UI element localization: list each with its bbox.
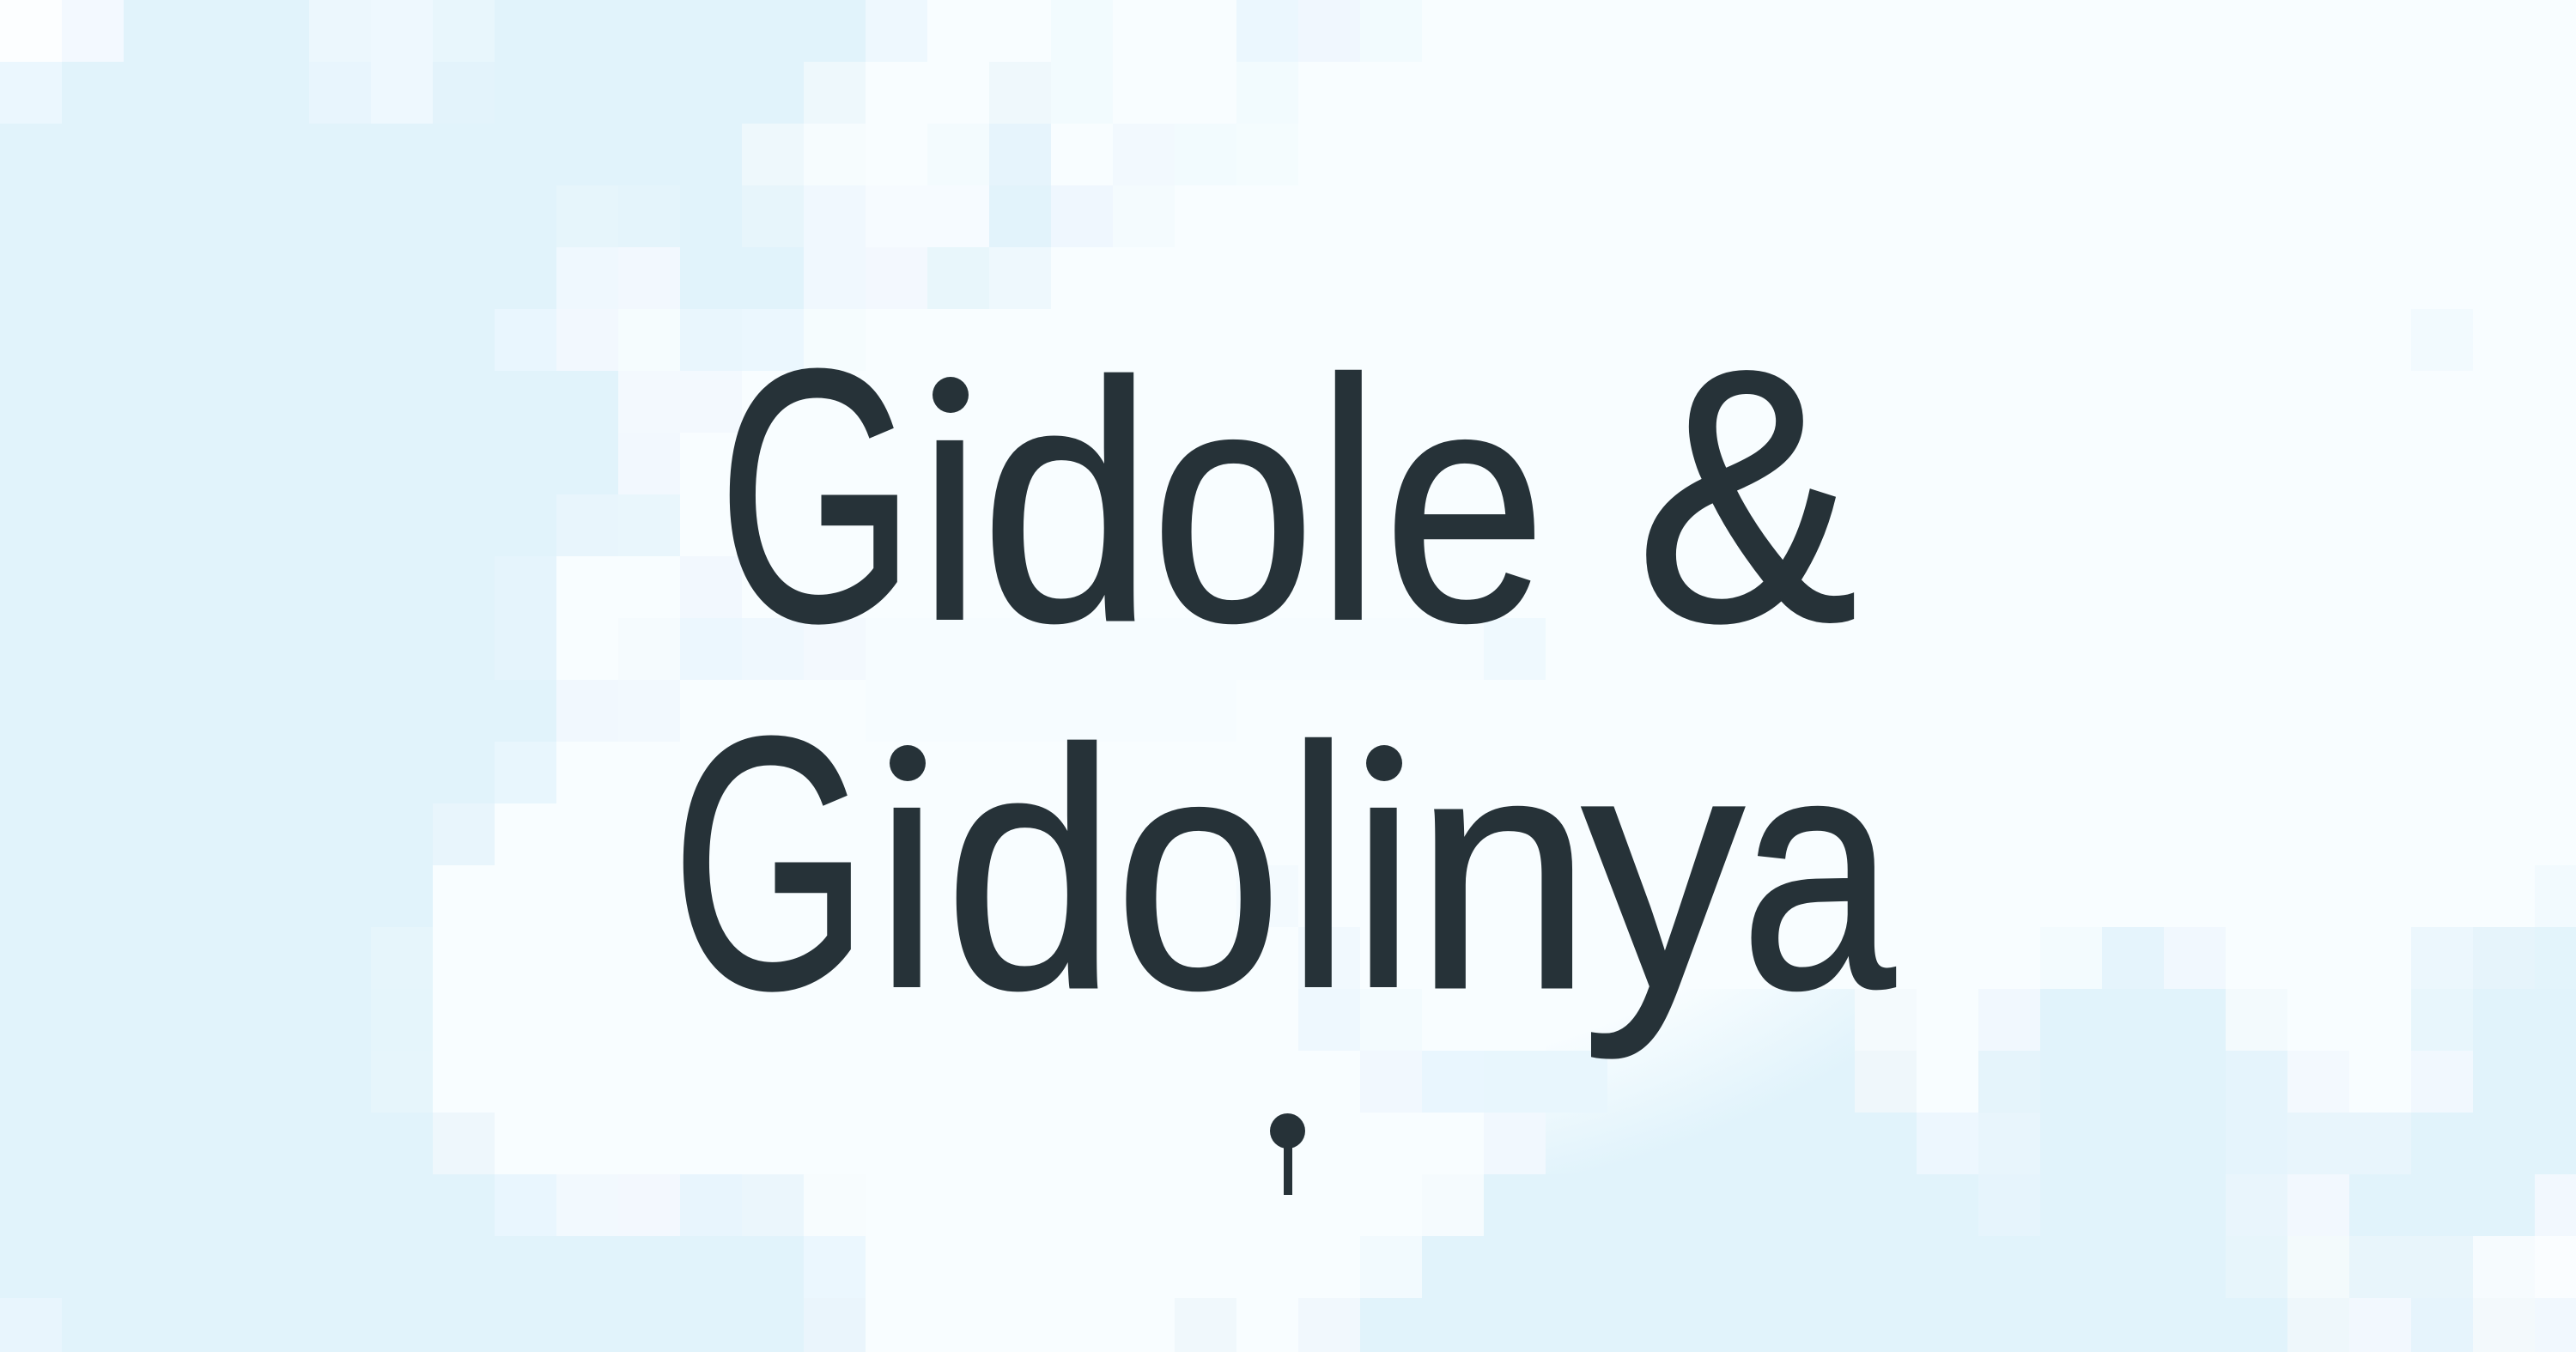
title line 1: d <box>981 312 1153 693</box>
title line 1: o <box>1151 319 1315 691</box>
icon: round dot of i, line 1 <box>933 377 969 413</box>
title line 2: i <box>873 680 941 1060</box>
title line 1: & <box>1636 295 1858 696</box>
title line 2: G <box>671 663 869 1064</box>
title line 1: G <box>718 295 915 696</box>
title line 1 <box>718 295 1858 696</box>
title line 2: i <box>1350 680 1418 1060</box>
title line 1: i <box>916 312 984 693</box>
icon: round dot of second i, line 2 <box>1366 745 1402 781</box>
title line 1: e <box>1383 319 1546 691</box>
title line 2: y <box>1582 680 1745 1060</box>
title line 2: a <box>1741 685 1895 1058</box>
title line 2: l <box>1285 676 1352 1061</box>
title line 2: n <box>1414 685 1592 1058</box>
title line 2: d <box>945 680 1116 1060</box>
icon: Gidole logo mark <box>1270 1113 1305 1195</box>
title line 2: o <box>1115 687 1282 1058</box>
title <box>671 295 1896 1064</box>
icon: round dot of first i, line 2 <box>890 745 926 781</box>
title line 2 <box>671 663 1896 1064</box>
title line 1: l <box>1315 308 1382 694</box>
